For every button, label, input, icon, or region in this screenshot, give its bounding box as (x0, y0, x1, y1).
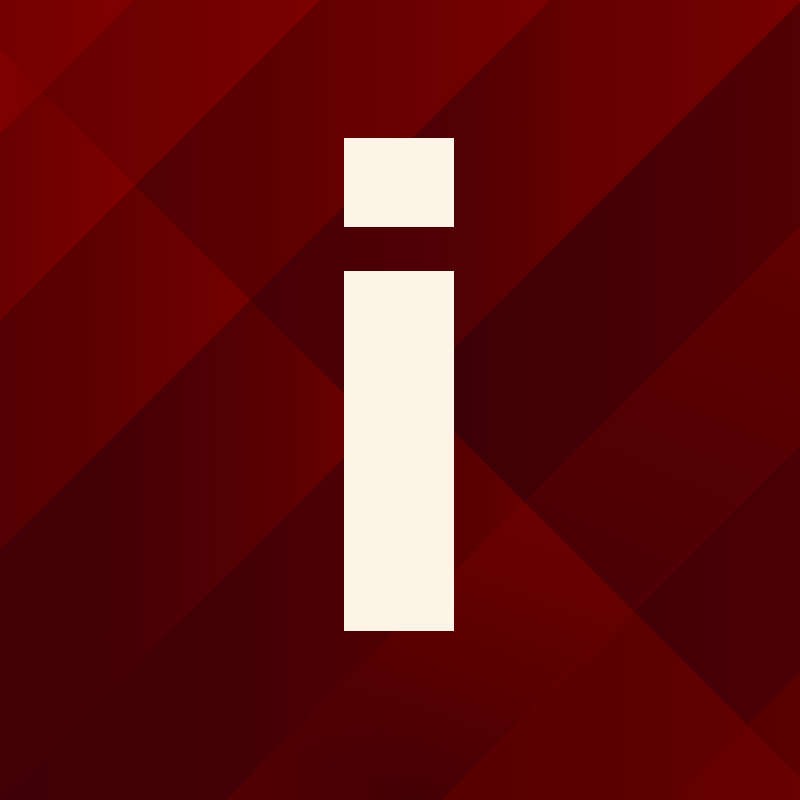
i dot (344, 138, 454, 227)
icon: letter i (344, 138, 454, 631)
i stem (344, 271, 454, 631)
